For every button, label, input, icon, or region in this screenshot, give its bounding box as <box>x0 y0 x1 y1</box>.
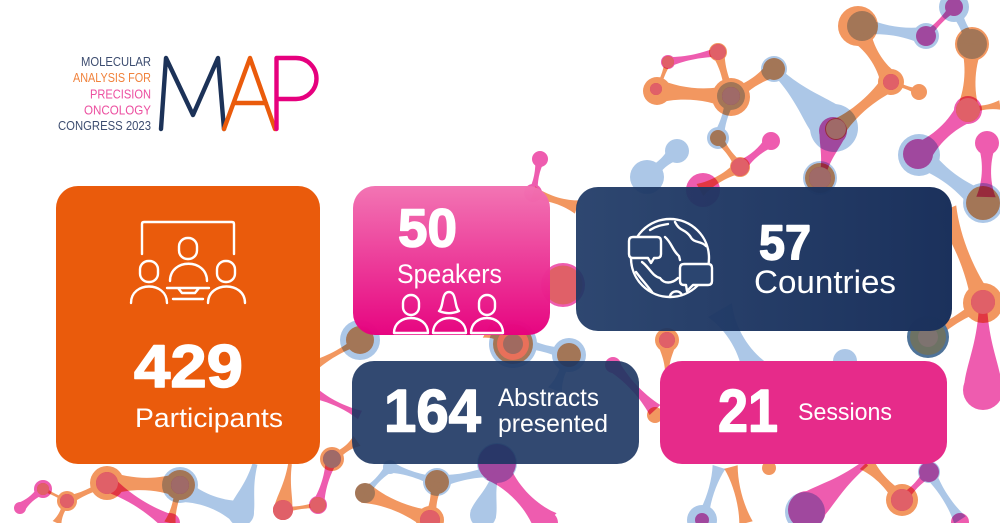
logo letter M <box>161 58 224 129</box>
logo text block: MOLECULAR <box>81 54 151 69</box>
logo text block: CONGRESS 2023 <box>58 118 151 133</box>
logo text block: ANALYSIS FOR <box>73 70 151 85</box>
number: 50: 50 <box>398 198 457 258</box>
logo text block: PRECISION <box>90 86 151 102</box>
label: Abstracts presented: Abstracts <box>498 384 599 412</box>
logo letter P <box>276 58 316 129</box>
label: Participants: Participants <box>135 403 283 433</box>
icon: audience before a screen <box>131 222 245 303</box>
icon: globe with speech bubbles <box>629 219 712 297</box>
logo text block <box>58 54 151 133</box>
number: 21: 21 <box>718 378 778 444</box>
label: Sessions: Sessions <box>798 399 892 426</box>
label: Countries: Countries <box>754 264 896 300</box>
icon: three speakers <box>394 292 503 333</box>
logo letter A <box>224 58 275 129</box>
panel: speakers <box>353 186 550 335</box>
number: 429: 429 <box>134 333 243 400</box>
panel: participants <box>56 186 320 464</box>
logo text block: ONCOLOGY <box>84 102 151 118</box>
panel: abstracts presented <box>352 361 639 464</box>
label: Abstracts presented: presented <box>498 410 608 438</box>
label: Speakers: Speakers <box>397 259 502 289</box>
panel: sessions <box>660 361 947 464</box>
number: 57: 57 <box>759 216 811 270</box>
logo: MAP congress <box>58 54 316 133</box>
label: Abstracts presented <box>498 384 608 438</box>
number: 164: 164 <box>384 378 482 444</box>
panel: countries <box>576 187 952 331</box>
